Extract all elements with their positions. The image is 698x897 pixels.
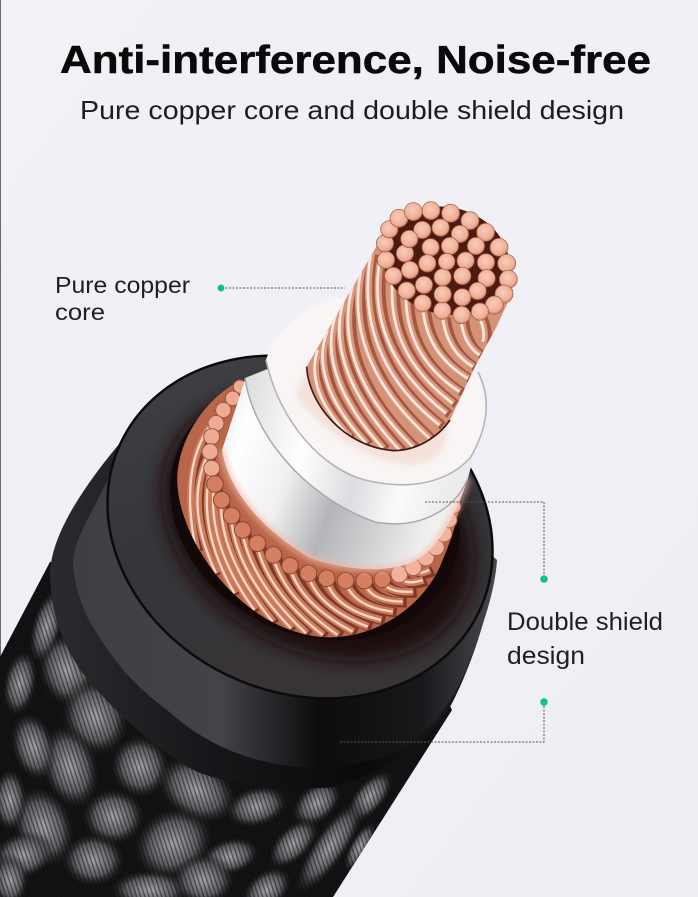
label: pure copper core: Pure copper — [55, 272, 190, 298]
callout: double shield design — [340, 502, 663, 742]
insulation lower cylinder — [222, 340, 470, 569]
title: Anti-interference, Noise-free — [60, 39, 651, 82]
copper reflection in insulation — [295, 360, 446, 465]
upper leader line — [425, 502, 544, 578]
lower leader line — [340, 703, 544, 742]
core twisted strands — [306, 246, 514, 450]
connector ring front face — [51, 294, 549, 760]
cable illustration — [0, 193, 549, 897]
label: double shield design: Double shield — [507, 608, 663, 636]
insulation top disc — [266, 298, 485, 485]
callout: pure copper core — [55, 272, 345, 325]
braided jacket — [0, 562, 452, 897]
label: pure copper core: core — [55, 299, 105, 325]
shield strand ends: left — [202, 380, 247, 476]
white insulation — [222, 298, 486, 569]
inner copper core — [306, 201, 518, 452]
lower green dot — [540, 698, 548, 706]
upper green dot — [540, 575, 548, 583]
core cut face — [370, 193, 522, 329]
connector ring middle band — [73, 400, 497, 767]
shield strand ends: bottom — [207, 476, 391, 589]
shield strand ends: right — [391, 500, 461, 583]
copper shield strands — [177, 380, 462, 638]
green dot — [218, 284, 224, 292]
label: double shield design: design — [507, 642, 585, 670]
subtitle: Pure copper core and double shield design — [80, 95, 624, 125]
insulation middle band — [245, 340, 478, 524]
connector ring outer band — [50, 400, 497, 789]
leader line — [222, 287, 345, 289]
dark recess around shield — [113, 330, 523, 716]
